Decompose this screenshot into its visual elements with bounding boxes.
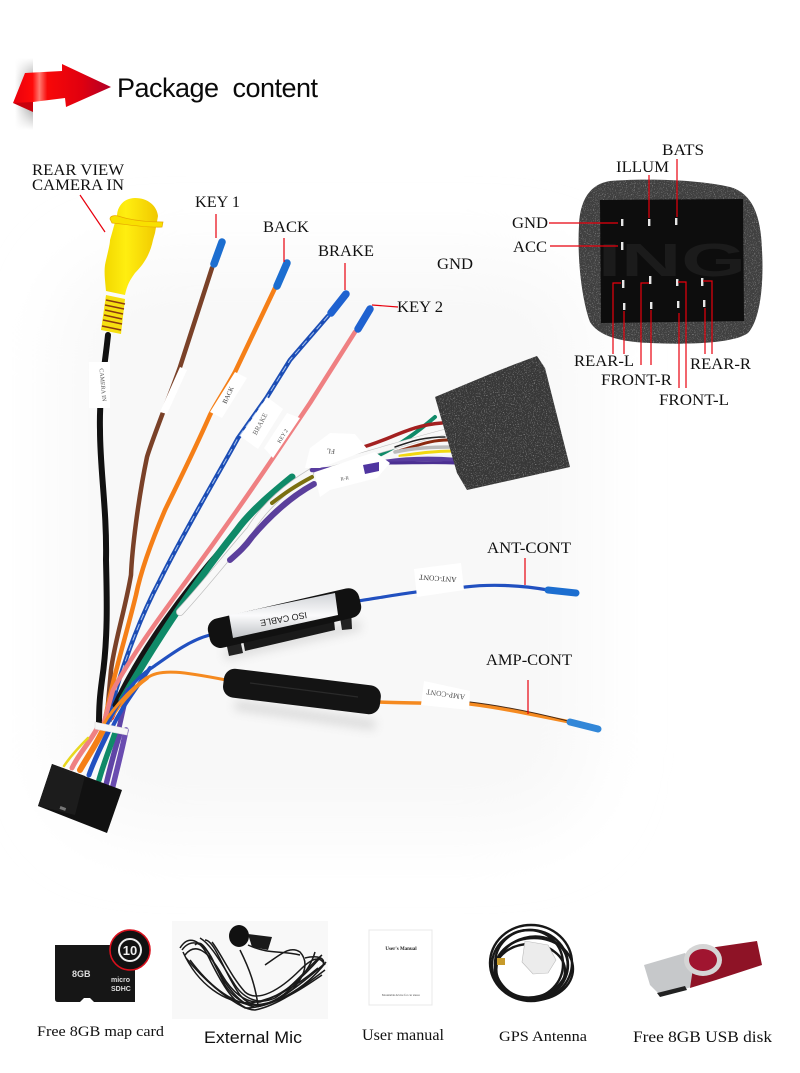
- ISO connector pinout: [512, 142, 762, 409]
- wiring harness: [38, 198, 598, 833]
- item: user manual: Mountable device for car stereo: [382, 993, 421, 997]
- label: back: [263, 219, 310, 262]
- wire: back orange: [104, 288, 275, 725]
- wire: red in bundle: [112, 585, 198, 718]
- label: key 1: [160, 367, 187, 414]
- wire: amp-cont orange: [103, 672, 226, 725]
- wire: rear view camera black: [99, 335, 108, 725]
- label: gnd: GND: [437, 256, 473, 273]
- camera connector yellow: [101, 198, 163, 334]
- pin labels: FRONT-L: [659, 392, 729, 409]
- item: user manual: User manual: [362, 1027, 444, 1044]
- label: amp-cont: [486, 652, 573, 714]
- label: ant-cont: [487, 540, 572, 585]
- label: white sleeve with wires: [315, 452, 390, 497]
- item: user manual: [362, 930, 444, 1044]
- label: key 2: KEY 2: [397, 299, 443, 316]
- label: key 2: KEY 2: [277, 428, 290, 445]
- label: rear view camera in: [32, 162, 124, 232]
- label: ant-cont: [414, 563, 464, 597]
- callout labels: harness: [32, 162, 573, 714]
- label: brake: BRAKE: [318, 243, 374, 260]
- wire: key 2 pink: [104, 332, 355, 722]
- label: key 1: KEY 1: [195, 194, 240, 211]
- item: USB disk: [633, 941, 772, 1046]
- photo background shading: [60, 260, 590, 830]
- upper bundle overlay to tie: [106, 668, 150, 728]
- pin labels: GND: [512, 215, 548, 232]
- pin labels: ACC: [513, 239, 547, 256]
- pins: [621, 218, 705, 310]
- label: rear view camera in: REAR VIEW: [32, 162, 124, 179]
- wire tips blue: [214, 242, 598, 729]
- wire: key 1 brown: [107, 268, 212, 715]
- wire: black in bundle: [115, 545, 225, 705]
- label: back: BACK: [222, 385, 236, 405]
- accessories row: [37, 921, 772, 1047]
- label: camera: [89, 362, 110, 408]
- item: USB disk: Free 8GB USB disk: [633, 1029, 772, 1046]
- pin labels: FRONT-R: [601, 372, 673, 389]
- item: 8GB map card: SDHC: [111, 986, 131, 993]
- item: GPS antenna: [489, 925, 587, 1045]
- label: amp-cont: [421, 681, 470, 710]
- watermark: ING: [598, 234, 746, 286]
- black socket: [600, 199, 744, 323]
- label: amp-cont: AMP-CONT: [425, 687, 466, 702]
- label: back: BACK: [263, 219, 310, 236]
- black multi-pin connector: [38, 764, 122, 833]
- label: key 1: [195, 194, 240, 238]
- wire: brake blue: [110, 316, 328, 720]
- item: 8GB map card: micro: [111, 977, 130, 984]
- label: rear view camera in: CAMERA IN: [32, 177, 124, 194]
- module: ISO cable filter: [206, 586, 363, 656]
- item: 8GB map card: [37, 930, 165, 1040]
- pin labels: REAR-L: [574, 353, 634, 370]
- wire bundle to foam plug: [122, 417, 455, 700]
- label: camera: CAMERA IN: [98, 368, 106, 402]
- soft shadows under modules: [225, 625, 375, 725]
- label: ant-cont: ANT-CONT: [487, 540, 572, 557]
- label: FL: FL: [326, 447, 335, 455]
- item: GPS antenna: GPS Antenna: [499, 1029, 587, 1045]
- title: Package content: [117, 73, 318, 103]
- pin labels: ILLUM: [616, 159, 669, 176]
- label: brake: BRAKE: [251, 412, 269, 436]
- wire labels: [89, 362, 470, 710]
- pin labels: BATS: [662, 142, 704, 159]
- item: user manual: User's Manual: [385, 947, 417, 952]
- label: ant-cont: ANT-CONT: [418, 573, 457, 584]
- item: external mic: External Mic: [204, 1028, 303, 1047]
- label: amp-cont: AMP-CONT: [486, 652, 573, 669]
- header: package content: [13, 58, 318, 130]
- pin callout lines: [549, 159, 712, 388]
- label: brake: [240, 397, 283, 449]
- icon: red ribbon arrow: [13, 58, 111, 130]
- item: external mic: [172, 921, 328, 1047]
- label: FL: [305, 433, 368, 468]
- cable tie: [95, 722, 128, 735]
- item: 8GB map card: Free 8GB map card: [37, 1024, 165, 1040]
- label: brake: [318, 243, 374, 290]
- label: key 2: [372, 299, 443, 316]
- item: 8GB map card: 10: [123, 943, 137, 958]
- foam plug: [435, 356, 570, 490]
- pin labels: [512, 142, 752, 409]
- label: white sleeve with wires: R-R: [340, 476, 350, 483]
- module: amp filter: [222, 667, 382, 716]
- label: key 2: [264, 413, 300, 458]
- wires below cable tie: [64, 727, 126, 790]
- foam surround: [579, 180, 762, 344]
- module: ISO cable filter: ISO CABLE: [259, 610, 308, 628]
- wire: ant-cont blue: [107, 635, 210, 725]
- pin labels: REAR-R: [690, 356, 752, 373]
- label: back: [210, 372, 247, 418]
- item: 8GB map card: 8GB: [72, 969, 91, 979]
